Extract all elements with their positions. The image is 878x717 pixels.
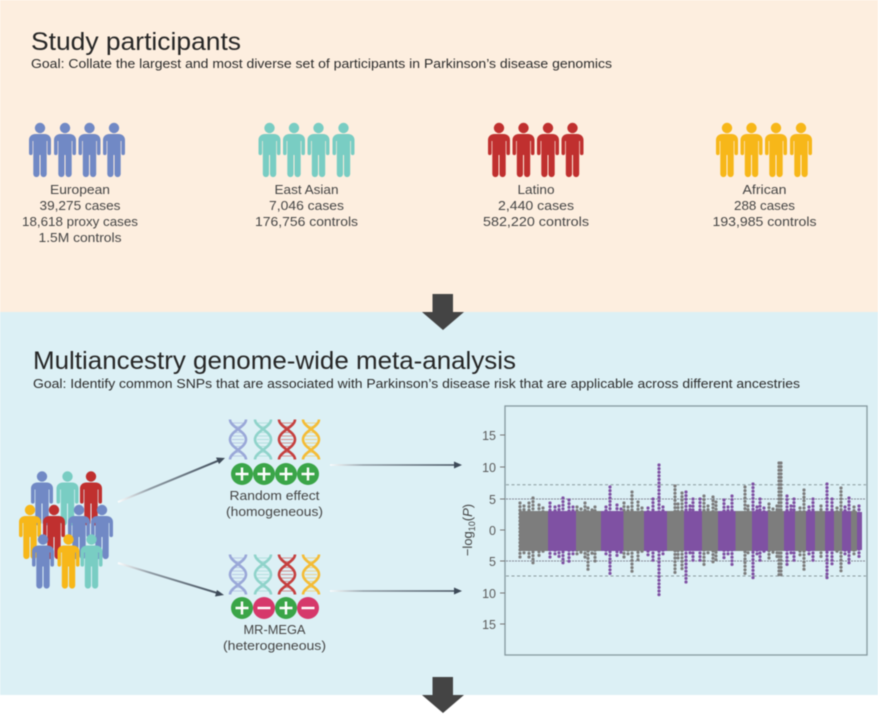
group: MR-MEGA [223, 554, 326, 653]
y axis ticks and numbers: 15 [482, 618, 496, 632]
group: random effect [226, 420, 323, 519]
y axis ticks and numbers: 5 [489, 493, 496, 507]
text: East Asian counts: East Asian [274, 182, 338, 197]
group: East Asian [255, 123, 359, 229]
panel: study participants [0, 0, 878, 312]
arrow: crowd to random effect [118, 458, 225, 502]
y axis ticks and numbers: 10 [482, 587, 496, 601]
panel: multiancestry genome-wide meta-analysis [0, 312, 878, 695]
text: East Asian counts: 7,046 cases [269, 198, 345, 213]
arrow: MR-MEGA to plot [330, 588, 462, 594]
text: European counts: 18,618 proxy cases [22, 214, 139, 229]
goal text: multiancestry meta-analysis: Goal: Identify common SNPs that are associated with Parkinson’s disease risk that are applicable across different ancestries [33, 377, 800, 391]
heading: multiancestry meta-analysis: Multiancestry genome-wide meta-analysis [33, 347, 516, 375]
label: MR-MEGA: (heterogeneous) [223, 638, 326, 653]
plot frame [505, 406, 867, 655]
purple SNP dots [550, 465, 859, 597]
gray SNP dots [520, 463, 854, 575]
y axis ticks and numbers [482, 429, 505, 632]
y axis label: ( [460, 516, 475, 521]
text: Latino counts: 582,220 controls [483, 214, 590, 229]
y axis ticks and numbers: 10 [482, 461, 496, 475]
y axis ticks and numbers: 0 [489, 524, 496, 538]
y axis ticks and numbers: 15 [482, 429, 496, 443]
label: random effect [226, 488, 323, 519]
arrow: crowd to MR-MEGA [118, 563, 224, 596]
icon: DNA helices, random effect [230, 420, 319, 460]
icon: crowd of mixed-ancestry people [19, 471, 113, 589]
icon: European people [29, 123, 125, 177]
label: random effect: Random effect [230, 488, 320, 503]
icon: four plus signs [231, 463, 319, 485]
significance thresholds [506, 485, 866, 576]
chromosome bands [519, 511, 862, 551]
text: African counts: 193,985 controls [712, 214, 817, 229]
text: Latino counts [483, 182, 590, 229]
text: Latino counts: Latino [518, 182, 554, 197]
text: European counts: 39,275 cases [40, 198, 121, 213]
y axis label: 10 [467, 521, 477, 531]
text: African counts: 288 cases [734, 198, 796, 213]
label: random effect: (homogeneous) [226, 504, 323, 519]
text: African counts [712, 182, 817, 229]
goal text: study participants: Goal: Collate the largest and most diverse set of participants in Parkinson’s disease genomics [31, 57, 612, 71]
label: MR-MEGA: MR-MEGA [244, 622, 306, 637]
text: European counts: European [50, 182, 110, 197]
group: European [22, 123, 139, 245]
text: European counts [22, 182, 139, 245]
icon: African people [716, 123, 812, 177]
group: African [712, 123, 817, 229]
icon: DNA helices, MR-MEGA [230, 554, 319, 594]
chart: Miami plot [460, 406, 867, 655]
text: African counts: African [742, 182, 786, 197]
text: East Asian counts [255, 182, 359, 229]
y axis label: P) [460, 504, 475, 517]
text: European counts: 1.5M controls [38, 230, 122, 245]
y axis ticks and numbers: 5 [489, 555, 496, 569]
icon: alternating plus and minus signs [231, 597, 319, 619]
icon: Latino people [488, 123, 584, 177]
group: Latino [483, 123, 590, 229]
label: MR-MEGA [223, 622, 326, 653]
icon: East Asian people [258, 123, 354, 177]
arrow: random effect to plot [330, 462, 462, 468]
text: East Asian counts: 176,756 controls [255, 214, 359, 229]
text: Latino counts: 2,440 cases [498, 198, 575, 213]
arrow: meta-analysis to next step [422, 677, 464, 713]
arrow: study participants to meta-analysis [422, 294, 464, 330]
heading: study participants: Study participants [31, 28, 241, 56]
y axis label: −log [460, 531, 475, 556]
